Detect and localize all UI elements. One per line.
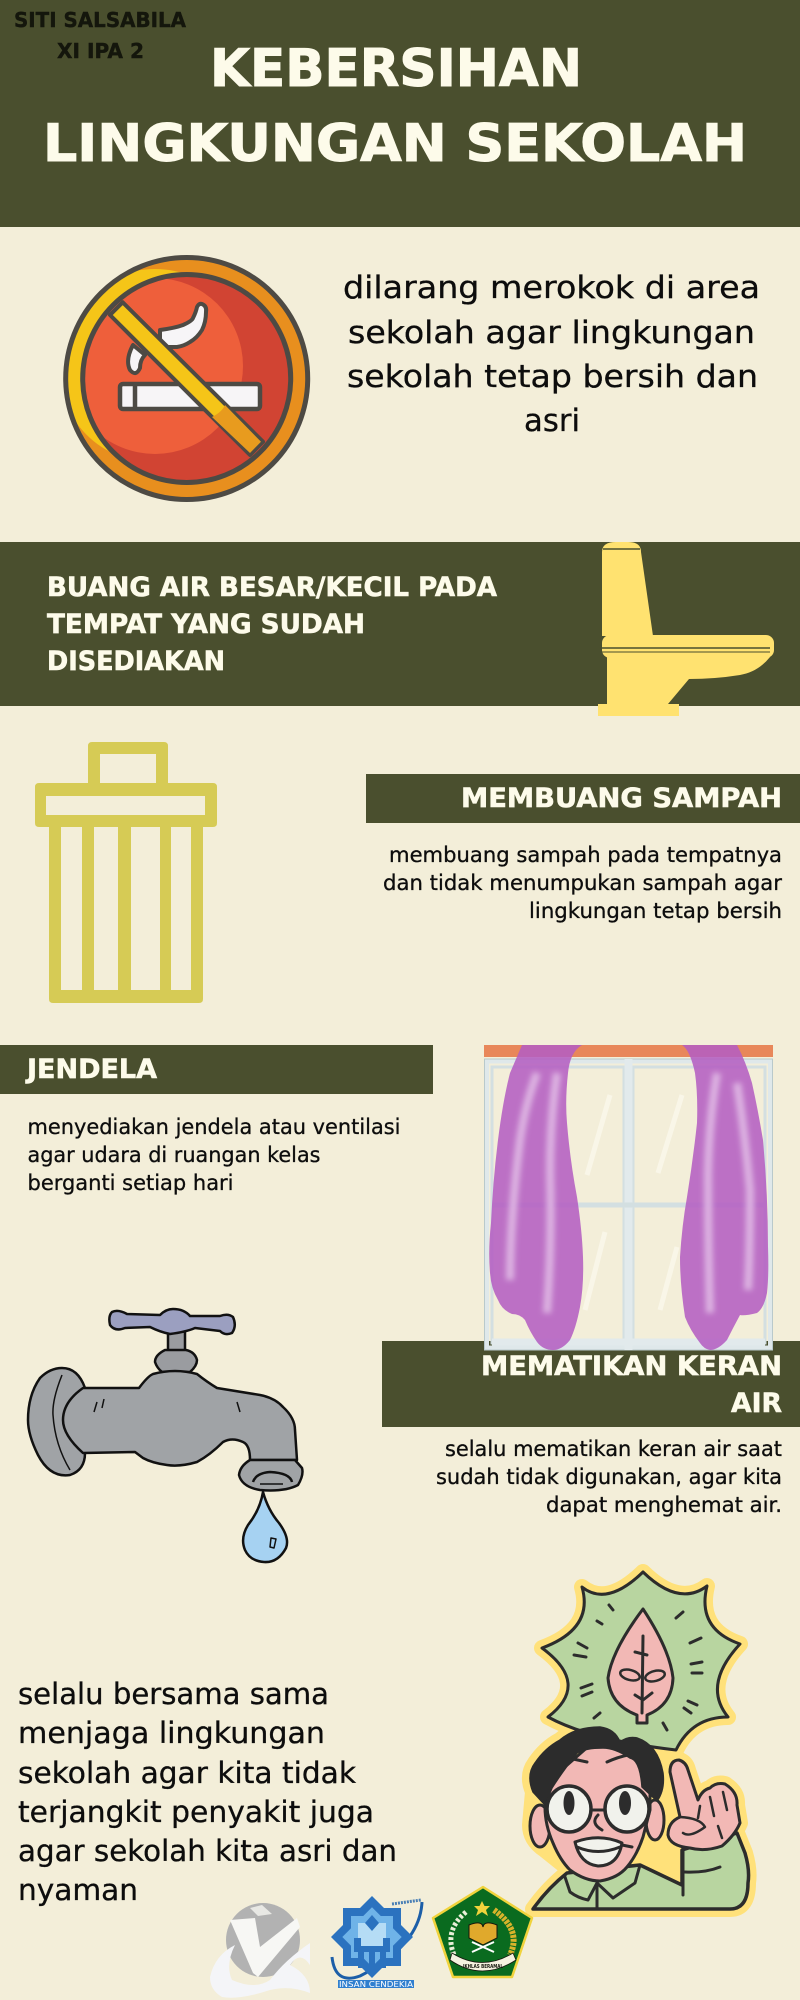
text block: closing message: agar sekolah kita asri dan <box>18 1834 397 1868</box>
text block: closing message: selalu bersama sama <box>18 1677 329 1711</box>
panel: jendela heading <box>0 1045 433 1094</box>
title: LINGKUNGAN SEKOLAH <box>43 114 747 174</box>
panel: toilet band <box>0 542 800 716</box>
author name: XI IPA 2 <box>57 39 144 63</box>
text block: jendela: agar udara di ruangan kelas <box>28 1143 320 1167</box>
text block: mematikan keran <box>436 1437 782 1517</box>
icon: trash can <box>35 742 217 1003</box>
illustration: man pointing with leaf badge <box>530 1572 749 1909</box>
slash bar <box>110 302 263 455</box>
text block: closing message: sekolah agar kita tidak <box>18 1756 356 1790</box>
face <box>545 1744 650 1881</box>
panel: membuang sampah heading: MEMBUANG SAMPAH <box>461 783 782 814</box>
panel: mematikan keran heading: AIR <box>731 1388 782 1419</box>
curtain: right <box>680 1045 768 1350</box>
icon: toilet <box>598 542 774 716</box>
text block: no smoking message: sekolah agar lingkungan <box>348 315 755 351</box>
text block: membuang sampah: dan tidak menumpukan sampah agar <box>383 871 782 895</box>
logo: globe school emblem <box>210 1903 310 1998</box>
text block: jendela <box>28 1115 400 1195</box>
author name: SITI SALSABILA <box>14 8 187 32</box>
text block: no smoking message: asri <box>524 403 580 439</box>
author name <box>14 8 187 63</box>
hair <box>530 1727 663 1805</box>
icon: water faucet <box>28 1309 302 1562</box>
text block: jendela: menyediakan jendela atau ventilasi <box>28 1115 400 1139</box>
title: KEBERSIHAN <box>210 39 582 99</box>
text block: no smoking message: dilarang merokok di area <box>343 270 760 306</box>
mouth <box>575 1838 632 1866</box>
hand <box>668 1760 740 1850</box>
text block: closing message: nyaman <box>18 1873 138 1907</box>
panel: membuang sampah heading <box>366 774 800 823</box>
heading: toilet: DISEDIAKAN <box>47 646 225 677</box>
leaf <box>608 1609 673 1723</box>
cigarette <box>120 384 260 409</box>
text block: jendela: berganti setiap hari <box>28 1171 234 1195</box>
text block: closing message: menjaga lingkungan <box>18 1716 325 1750</box>
text block: no smoking message: sekolah tetap bersih dan <box>347 359 758 395</box>
text block: closing message: terjangkit penyakit juga <box>18 1795 374 1829</box>
text block: membuang sampah <box>383 843 782 923</box>
title <box>43 39 747 174</box>
text block: mematikan keran: sudah tidak digunakan, agar kita <box>436 1465 782 1489</box>
text block: mematikan keran: dapat menghemat air. <box>546 1493 782 1517</box>
leaf badge <box>542 1572 740 1750</box>
text block: membuang sampah: lingkungan tetap bersih <box>529 899 782 923</box>
body <box>533 1833 749 1909</box>
logo: ministry of religion pentagon <box>433 1887 532 1977</box>
heading: toilet: TEMPAT YANG SUDAH <box>47 609 365 640</box>
panel: jendela heading: JENDELA <box>25 1054 157 1085</box>
glasses <box>547 1786 649 1832</box>
icon: no smoking sign <box>58 258 308 500</box>
smoke <box>128 304 206 373</box>
logo: insan cendekia <box>331 1896 422 1989</box>
panel: mematikan keran heading <box>382 1341 800 1427</box>
sticker outline <box>530 1572 749 1909</box>
curtain: left <box>489 1045 583 1350</box>
ears <box>530 1800 664 1847</box>
panel: mematikan keran heading: MEMATIKAN KERAN <box>481 1351 782 1382</box>
text block: mematikan keran: selalu mematikan keran air saat <box>445 1437 782 1461</box>
logo: ministry of religion pentagon: IKHLAS BERAMAL <box>463 1964 503 1970</box>
logo label: INSAN CENDEKIA <box>339 1980 414 1989</box>
heading: toilet: BUANG AIR BESAR/KECIL PADA <box>47 572 497 603</box>
text block: no smoking message <box>343 270 760 439</box>
heading: toilet <box>47 572 497 677</box>
text block: membuang sampah: membuang sampah pada tempatnya <box>389 843 782 867</box>
text block: closing message <box>18 1677 397 1907</box>
panel: header band <box>0 0 800 227</box>
icon: window with curtains <box>484 1045 773 1350</box>
